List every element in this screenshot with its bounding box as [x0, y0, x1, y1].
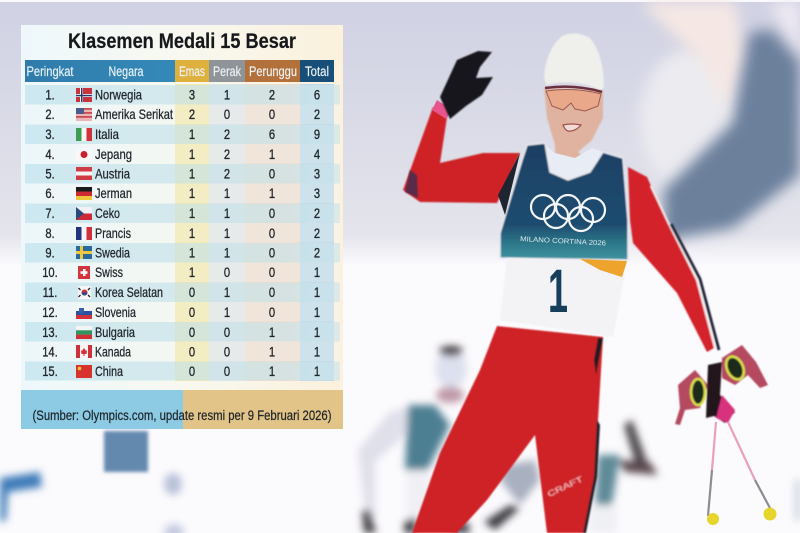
mouth: [563, 124, 581, 131]
row 11 Korea Selatan: 0: [269, 285, 275, 300]
row 10 Swiss: 1: [314, 265, 320, 280]
row 13 Bulgaria: [42, 324, 320, 340]
row 11 Korea Selatan: 1: [314, 285, 320, 300]
row 15 China: 1: [269, 364, 275, 379]
medal column tints: [175, 84, 334, 381]
row 15 China: 0: [224, 364, 230, 379]
row stripes: [25, 85, 340, 380]
row 4 Jepang: 2: [224, 147, 230, 162]
bib orange stripe: [580, 259, 627, 277]
row 3 Italia: 3.: [45, 127, 55, 142]
row 14 Kanada: 14.: [42, 344, 58, 360]
row 14 Kanada: Kanada: [95, 344, 131, 360]
row 14 Kanada: [42, 344, 320, 360]
table header: Peringkat: [26, 64, 74, 79]
olympic rings: [531, 195, 605, 231]
row 5 Austria: 5.: [45, 166, 55, 182]
row 2 Amerika Serikat: [45, 106, 320, 122]
row 2 Amerika Serikat: 2.: [45, 107, 55, 122]
table header: Perak: [213, 64, 241, 79]
row 11 Korea Selatan: 1: [224, 285, 230, 300]
row 12 Slovenia: 12.: [42, 305, 58, 320]
row 13 Bulgaria: 0: [224, 325, 230, 340]
row 9 Swedia: [45, 244, 320, 261]
row 7 Ceko: [45, 205, 320, 221]
row 9 Swedia: 9.: [45, 245, 55, 261]
title: Klasemen Medali 15 Besar: [68, 30, 296, 53]
row 15 China: 1: [314, 364, 320, 379]
row 4 Jepang: 4.: [45, 147, 55, 162]
row 2 Amerika Serikat: Amerika Serikat: [95, 106, 173, 122]
background skier left: [358, 346, 470, 533]
row 8 Prancis: [45, 225, 320, 241]
row 7 Ceko: Ceko: [95, 205, 120, 221]
row 14 Kanada: 1: [314, 344, 320, 360]
row 1 Norwegia: 3: [189, 87, 195, 103]
row 3 Italia: 6: [269, 127, 275, 142]
row 11 Korea Selatan: 11.: [43, 285, 57, 300]
row 1 Norwegia: 1.: [45, 87, 55, 103]
row 8 Prancis: 8.: [45, 226, 55, 241]
row 3 Italia: 1: [189, 127, 195, 142]
row 10 Swiss: 0: [224, 265, 230, 280]
row 13 Bulgaria: 1: [269, 325, 275, 340]
sunglasses: [546, 90, 601, 111]
row 1 Norwegia: Norwegia: [95, 86, 142, 102]
row 12 Slovenia: 0: [269, 305, 275, 320]
row 11 Korea Selatan: [43, 284, 320, 300]
row 8 Prancis: 1: [189, 226, 195, 241]
row 10 Swiss: 1: [189, 265, 195, 280]
ski poles: [707, 422, 776, 525]
table header: [25, 60, 334, 82]
row 14 Kanada: 0: [224, 344, 230, 360]
white collar: [546, 146, 603, 180]
row 12 Slovenia: 1: [314, 305, 320, 320]
row 6 Jerman: 1: [269, 186, 275, 201]
row 13 Bulgaria: 1: [314, 325, 320, 340]
row 14 Kanada: 1: [269, 344, 275, 360]
row 1 Norwegia: 1: [224, 87, 230, 103]
row 7 Ceko: 2: [314, 206, 320, 221]
row 15 China: China: [95, 363, 123, 379]
row 9 Swedia: 0: [269, 245, 275, 261]
red race suit legs: [412, 326, 603, 533]
row 4 Jepang: 4: [314, 147, 320, 162]
row 6 Jerman: 1: [224, 186, 230, 201]
row 5 Austria: 3: [314, 166, 320, 182]
row 4 Jepang: 1: [189, 147, 195, 162]
row 6 Jerman: [45, 185, 320, 201]
raised arm: [403, 107, 520, 203]
table header: Total: [305, 64, 329, 79]
row 5 Austria: 0: [269, 166, 275, 182]
table header: Emas: [179, 64, 205, 79]
row 1 Norwegia: [45, 86, 320, 103]
row 1 Norwegia: 6: [314, 87, 320, 103]
row 15 China: [42, 363, 320, 379]
row 6 Jerman: Jerman: [95, 185, 132, 201]
bib vest: [500, 143, 628, 260]
row 12 Slovenia: 0: [189, 305, 195, 320]
footer source note: (Sumber: Olympics.com, update resmi per 9 Februari 2026): [32, 408, 332, 423]
row 8 Prancis: Prancis: [95, 225, 131, 241]
row 11 Korea Selatan: 0: [189, 285, 195, 300]
row 7 Ceko: 1: [189, 206, 195, 221]
row 7 Ceko: 0: [269, 206, 275, 221]
row 6 Jerman: 1: [189, 186, 195, 201]
row 5 Austria: 2: [224, 166, 230, 182]
row 9 Swedia: 1: [189, 245, 195, 261]
ski pole grips: [675, 345, 768, 425]
row 12 Slovenia: [42, 304, 320, 320]
table header: Negara: [108, 64, 144, 79]
row 13 Bulgaria: Bulgaria: [95, 324, 135, 340]
row 2 Amerika Serikat: 2: [314, 107, 320, 122]
row 4 Jepang: Jepang: [95, 146, 132, 162]
row 9 Swedia: 1: [224, 245, 230, 261]
black glove: [440, 51, 493, 119]
row 3 Italia: [45, 126, 320, 142]
row 3 Italia: Italia: [95, 126, 119, 142]
row 13 Bulgaria: 0: [189, 325, 195, 340]
background blurred markers: [0, 431, 184, 533]
row 5 Austria: 1: [189, 166, 195, 182]
row 13 Bulgaria: 13.: [42, 325, 58, 340]
row 8 Prancis: 2: [314, 226, 320, 241]
row 15 China: 0: [189, 364, 195, 379]
table header: Perunggu: [249, 64, 297, 79]
footer source note: [21, 390, 343, 429]
row 5 Austria: Austria: [95, 166, 130, 182]
row 12 Slovenia: 1: [224, 305, 230, 320]
row 5 Austria: [45, 166, 320, 182]
panel: medal table: [21, 25, 343, 429]
row 10 Swiss: [42, 264, 320, 280]
row 15 China: 15.: [42, 364, 58, 379]
row 4 Jepang: [45, 146, 320, 162]
bib number: 1: [548, 257, 568, 325]
row 6 Jerman: 6.: [45, 186, 55, 201]
row 3 Italia: 2: [224, 127, 230, 142]
row 8 Prancis: 1: [224, 226, 230, 241]
row 9 Swedia: Swedia: [95, 244, 130, 260]
row 2 Amerika Serikat: 0: [269, 107, 275, 122]
row 10 Swiss: Swiss: [95, 264, 123, 280]
row 8 Prancis: 0: [269, 226, 275, 241]
row 10 Swiss: 10.: [42, 265, 58, 280]
red race suit legs: CRAFT: [546, 475, 584, 499]
background skier right: [484, 420, 800, 533]
neck and face: [544, 88, 603, 162]
row 6 Jerman: 3: [314, 186, 320, 201]
row 7 Ceko: 7.: [45, 206, 55, 221]
bib white lower: [500, 258, 627, 337]
row 1 Norwegia: 2: [269, 87, 275, 103]
row 2 Amerika Serikat: 0: [224, 107, 230, 122]
row 12 Slovenia: Slovenia: [95, 304, 136, 320]
row 2 Amerika Serikat: 2: [189, 107, 195, 122]
icon: pink wrist band: [432, 100, 452, 119]
white knit hat: [544, 33, 604, 90]
row 11 Korea Selatan: Korea Selatan: [95, 284, 163, 300]
main skier: [403, 33, 776, 533]
row 7 Ceko: 1: [224, 206, 230, 221]
bib event text: MILANO CORTINA 2026: [520, 236, 606, 248]
row 3 Italia: 9: [314, 127, 320, 142]
row 9 Swedia: 2: [314, 245, 320, 261]
row 4 Jepang: 1: [269, 147, 275, 162]
row 10 Swiss: 0: [269, 265, 275, 280]
row 14 Kanada: 0: [189, 344, 195, 360]
other arm: [628, 167, 719, 352]
